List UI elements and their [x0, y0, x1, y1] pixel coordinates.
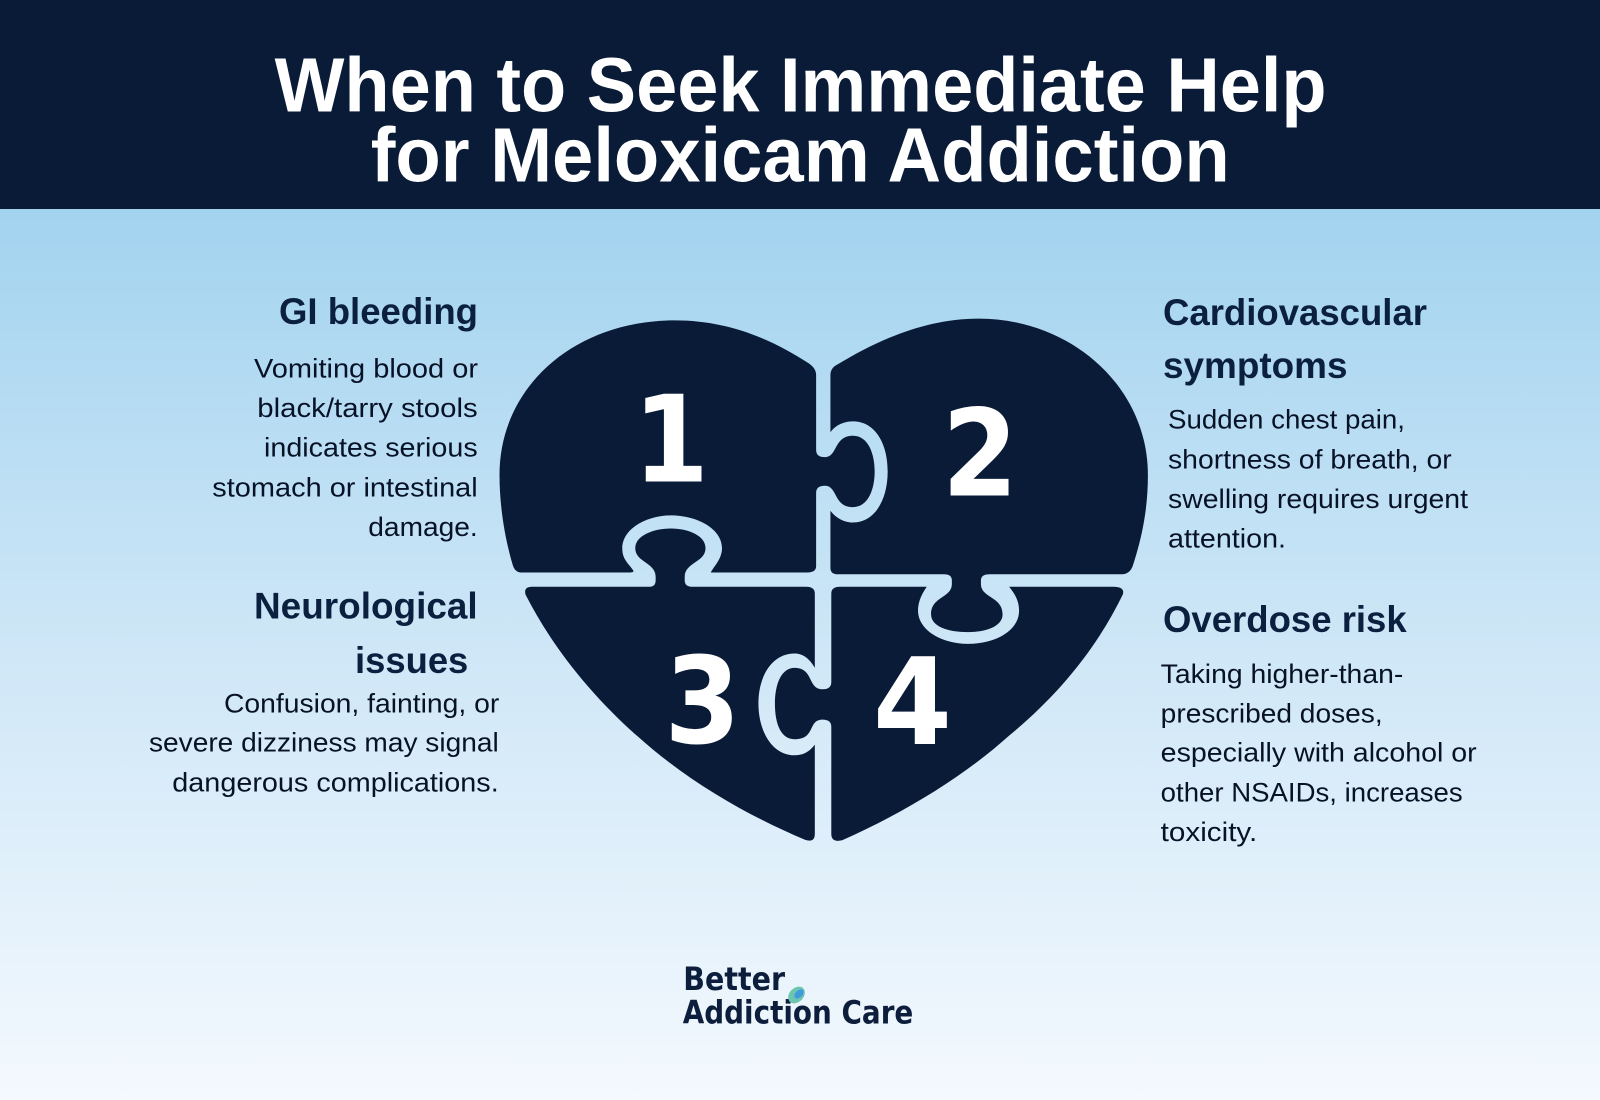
- number 2: 2: [942, 386, 1018, 525]
- text block: Neurological description: [149, 688, 499, 798]
- puzzle piece 1: [500, 320, 875, 572]
- text block: Cardiovascular description: Sudden chest pain,: [1168, 404, 1405, 434]
- text block: Cardiovascular description: swelling requires urgent: [1168, 484, 1469, 514]
- puzzle pieces: [500, 319, 1148, 841]
- heading: Neurological issues: Neurological: [254, 586, 478, 626]
- text block: Overdose description: [1161, 659, 1477, 847]
- logo: Better Addiction Care: [683, 960, 913, 1031]
- text block: GI bleeding description: damage.: [368, 512, 478, 542]
- text block: Overdose description: especially with alcohol or: [1161, 737, 1477, 767]
- text block: Overdose description: other NSAIDs, increases: [1161, 777, 1463, 807]
- title: [275, 43, 1327, 199]
- heading: Cardiovascular symptoms: Cardiovascular: [1163, 292, 1427, 333]
- text block: Overdose description: toxicity.: [1161, 817, 1257, 847]
- panel: GI bleeding: [212, 291, 478, 542]
- panel: Cardiovascular symptoms: [1163, 292, 1469, 554]
- heading: Neurological issues: issues: [355, 640, 468, 681]
- heading: Cardiovascular symptoms: [1163, 292, 1427, 386]
- text block: Overdose description: prescribed doses,: [1161, 698, 1383, 728]
- text block: GI bleeding description: stomach or intestinal: [212, 473, 478, 503]
- text block: GI bleeding description: indicates serious: [264, 433, 478, 463]
- icon: leaf: [785, 983, 808, 1007]
- text block: Cardiovascular description: shortness of breath, or: [1168, 445, 1452, 475]
- logo: Better Addiction Care: Addiction Care: [683, 993, 913, 1031]
- puzzle piece 3: [525, 529, 815, 841]
- text block: Neurological description: dangerous complications.: [172, 768, 499, 798]
- number 3: 3: [664, 633, 740, 772]
- logo: Better Addiction Care: Better: [683, 960, 785, 998]
- text block: Overdose description: Taking higher-than-: [1161, 659, 1403, 689]
- title: When to Seek Immediate Help: [275, 43, 1327, 129]
- panel: Neurological issues: [149, 586, 499, 798]
- title banner: [0, 0, 1600, 209]
- text block: GI bleeding description: black/tarry stools: [257, 393, 478, 423]
- heading: GI bleeding: GI bleeding: [279, 291, 478, 332]
- text block: GI bleeding description: Vomiting blood or: [254, 353, 478, 383]
- text block: Neurological description: severe dizziness may signal: [149, 727, 499, 757]
- number 1: 1: [633, 371, 709, 510]
- title: for Meloxicam Addiction: [371, 113, 1230, 199]
- text block: Cardiovascular description: attention.: [1168, 524, 1286, 554]
- number 4: 4: [873, 634, 952, 773]
- text block: Cardiovascular description: [1168, 404, 1469, 554]
- puzzle piece 2: [830, 319, 1148, 632]
- text block: Neurological description: Confusion, fainting, or: [224, 688, 499, 718]
- heart puzzle graphic: [500, 319, 1148, 841]
- text block: GI bleeding description: [212, 353, 478, 542]
- panel: Overdose risk: [1161, 599, 1477, 847]
- heading: Neurological issues: [254, 586, 478, 681]
- heading: Overdose risk: Overdose risk: [1163, 599, 1407, 640]
- heading: Cardiovascular symptoms: symptoms: [1163, 345, 1348, 386]
- puzzle piece 4: [775, 587, 1123, 841]
